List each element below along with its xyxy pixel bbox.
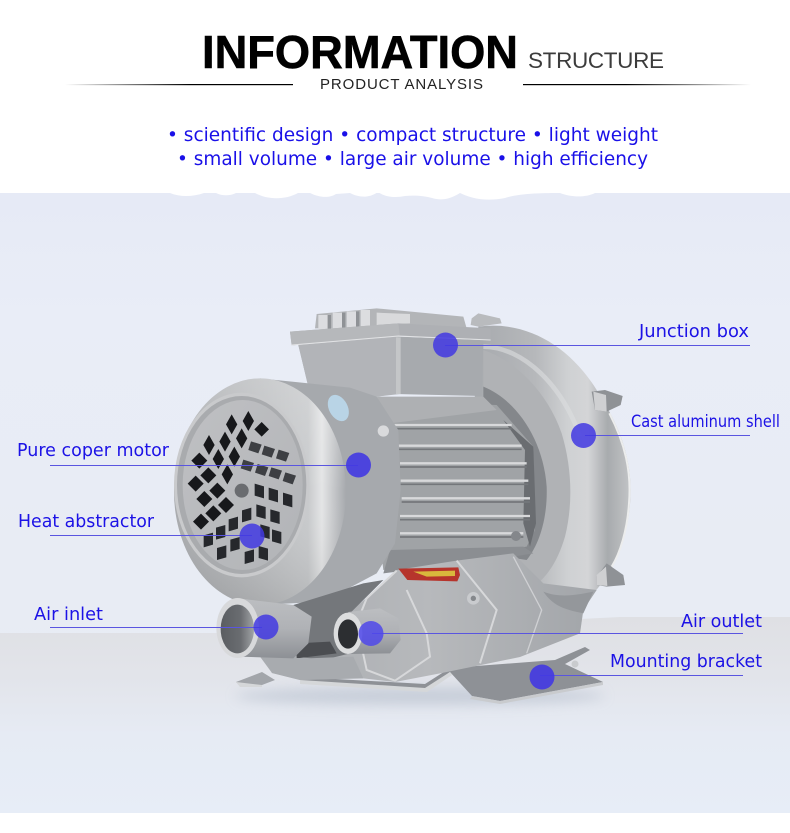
inlet tube — [216, 598, 312, 658]
callout: Air outlet: Air outlet — [681, 611, 762, 632]
volute housing — [260, 553, 597, 682]
callout: Junction box — [433, 321, 750, 358]
center gap between ports — [265, 580, 383, 680]
callout: Mounting bracket — [530, 651, 762, 690]
photo backdrop — [0, 192, 790, 813]
floor shadow — [235, 687, 605, 705]
feature list: • small volume • large air volume • high efficiency — [177, 148, 648, 170]
junction box — [290, 308, 491, 397]
fan cover — [174, 378, 346, 605]
name plate sticker — [324, 391, 353, 425]
motor flange — [260, 378, 401, 605]
callout: Air outlet — [358, 611, 762, 646]
callout: Cast aluminum shell — [571, 412, 780, 448]
callout: Heat abstractor: Heat abstractor — [18, 511, 155, 532]
callout: Pure coper motor — [17, 440, 371, 478]
callout: Pure coper motor: Pure coper motor — [17, 440, 170, 461]
feature list — [167, 124, 658, 170]
blower drawing — [174, 308, 631, 682]
flange screw — [378, 425, 389, 437]
vent holes — [188, 411, 269, 530]
motor fins — [363, 397, 536, 573]
callout: Air inlet — [34, 604, 278, 640]
callout: Air inlet: Air inlet — [34, 604, 103, 625]
mounting base plate — [236, 647, 603, 704]
center hole — [235, 484, 249, 498]
callout: Mounting bracket: Mounting bracket — [610, 651, 762, 672]
feature list: • scientific design • compact structure • light weight — [167, 124, 658, 146]
outlet tube — [334, 608, 401, 654]
title: STRUCTURE — [528, 48, 664, 73]
callout: Heat abstractor — [18, 511, 264, 548]
title: INFORMATION — [202, 26, 518, 78]
shell tabs — [471, 313, 625, 587]
cover face — [174, 393, 309, 577]
callout: Junction box: Junction box — [638, 321, 749, 342]
cast aluminum shell — [467, 326, 631, 653]
subtitle with rules: PRODUCT ANALYSIS — [320, 76, 483, 93]
title — [202, 26, 664, 78]
warning label — [398, 567, 460, 581]
